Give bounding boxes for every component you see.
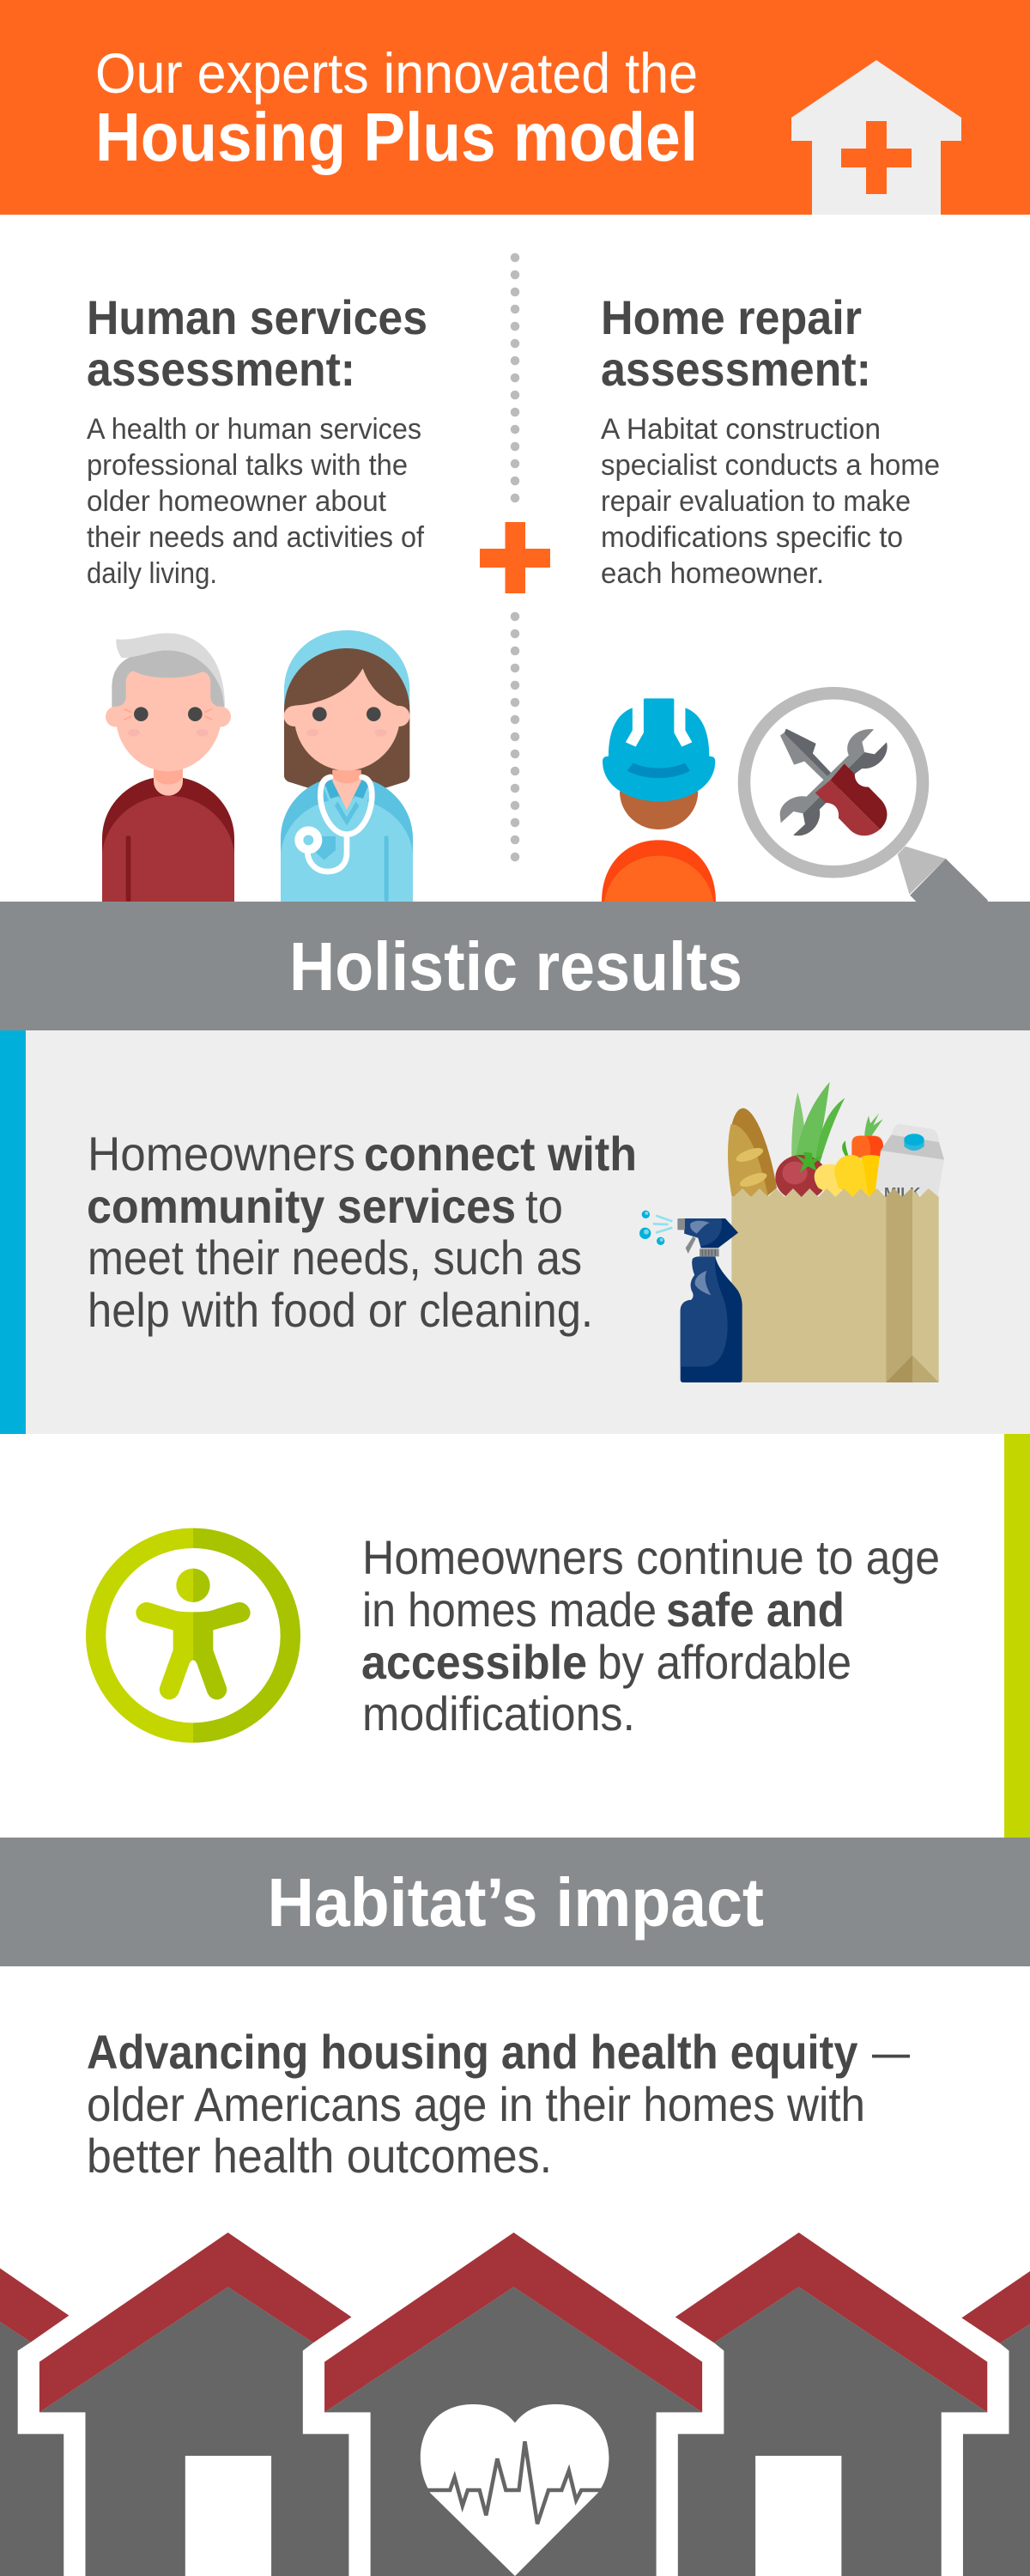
text block: community services: connect with: [364, 1127, 637, 1181]
heading: home repair assessment: Home repair: [601, 290, 862, 344]
text block: health equity: Advancing housing and health equity: [87, 2025, 858, 2079]
band: holistic results: [0, 902, 1030, 1030]
text block: health equity: [87, 2025, 910, 2183]
text block: community services: to: [525, 1179, 563, 1233]
icon: accessibility figure: [96, 1538, 290, 1733]
title: Housing Plus model: [95, 99, 698, 175]
text block: community services: help with food or cleaning.: [88, 1283, 593, 1337]
icon: construction specialist: [602, 698, 716, 902]
text block: home repair description: [601, 413, 940, 590]
text block: home repair description: specialist conducts a home: [601, 449, 940, 482]
band: holistic results: Holistic results: [289, 928, 742, 1005]
heading: home repair assessment: assessment:: [601, 342, 871, 396]
text block: safe and accessible: accessible: [361, 1635, 587, 1689]
text block: safe and accessible: safe and: [666, 1583, 845, 1637]
text block: safe and accessible: in homes made: [362, 1583, 657, 1637]
text block: health equity: better health outcomes.: [87, 2129, 552, 2183]
band: Habitat's impact: Habitat’s impact: [268, 1864, 764, 1941]
text block: community services: community services: [87, 1179, 516, 1233]
text block: home repair description: repair evaluation to make: [601, 485, 911, 518]
text block: human services description: their needs and activities of: [87, 521, 425, 554]
title: [95, 41, 698, 175]
icon: groceries and spray bottle: [639, 1082, 944, 1382]
text block: home repair description: modifications specific to: [601, 521, 903, 554]
icon: older homeowner: [102, 633, 234, 902]
heading: human services assessment: [87, 290, 427, 396]
text block: human services description: professional talks with the: [87, 449, 408, 482]
text block: home repair description: each homeowner.: [601, 557, 824, 590]
title: Our experts innovated the: [95, 41, 698, 105]
text block: health equity: —: [872, 2025, 910, 2079]
panel: home repair assessment: [601, 290, 988, 902]
text block: human services description: [87, 413, 425, 590]
heading: home repair assessment: [601, 290, 871, 396]
text block: safe and accessible: modifications.: [362, 1686, 635, 1741]
text block: home repair description: A Habitat construction: [601, 413, 881, 446]
icon: heart with heartbeat: [421, 2404, 611, 2576]
text block: community services: meet their needs, such as: [88, 1230, 582, 1285]
text block: community services: [87, 1127, 637, 1337]
icon: groceries and spray bottle: MILK: [884, 1184, 921, 1201]
heading: human services assessment: Human services: [87, 290, 427, 344]
text block: health equity: older Americans age in their homes with: [87, 2077, 865, 2131]
panel: human services assessment: [87, 290, 427, 902]
heading: human services assessment: assessment:: [87, 342, 355, 396]
header panel: [0, 0, 1030, 215]
icon: magnifying glass with tools: [744, 693, 988, 902]
text block: human services description: older homeowner about: [87, 485, 387, 518]
dotted divider with plus: [480, 258, 550, 858]
text block: community services: Homeowners: [88, 1127, 355, 1181]
icon: house with plus: [791, 60, 961, 215]
text block: human services description: A health or human services: [87, 413, 421, 446]
text block: human services description: daily living.: [87, 557, 217, 590]
panel: safe and accessible homes: [96, 1434, 1030, 1838]
text block: safe and accessible: Homeowners continue to age: [362, 1530, 940, 1584]
text block: safe and accessible: by affordable: [597, 1635, 851, 1689]
icon: health professional: [281, 630, 413, 902]
band: Habitat's impact: [0, 1838, 1030, 1966]
panel: community services: [0, 1030, 1030, 1434]
row of houses illustration: [0, 2233, 1030, 2576]
text block: safe and accessible: [361, 1530, 940, 1741]
